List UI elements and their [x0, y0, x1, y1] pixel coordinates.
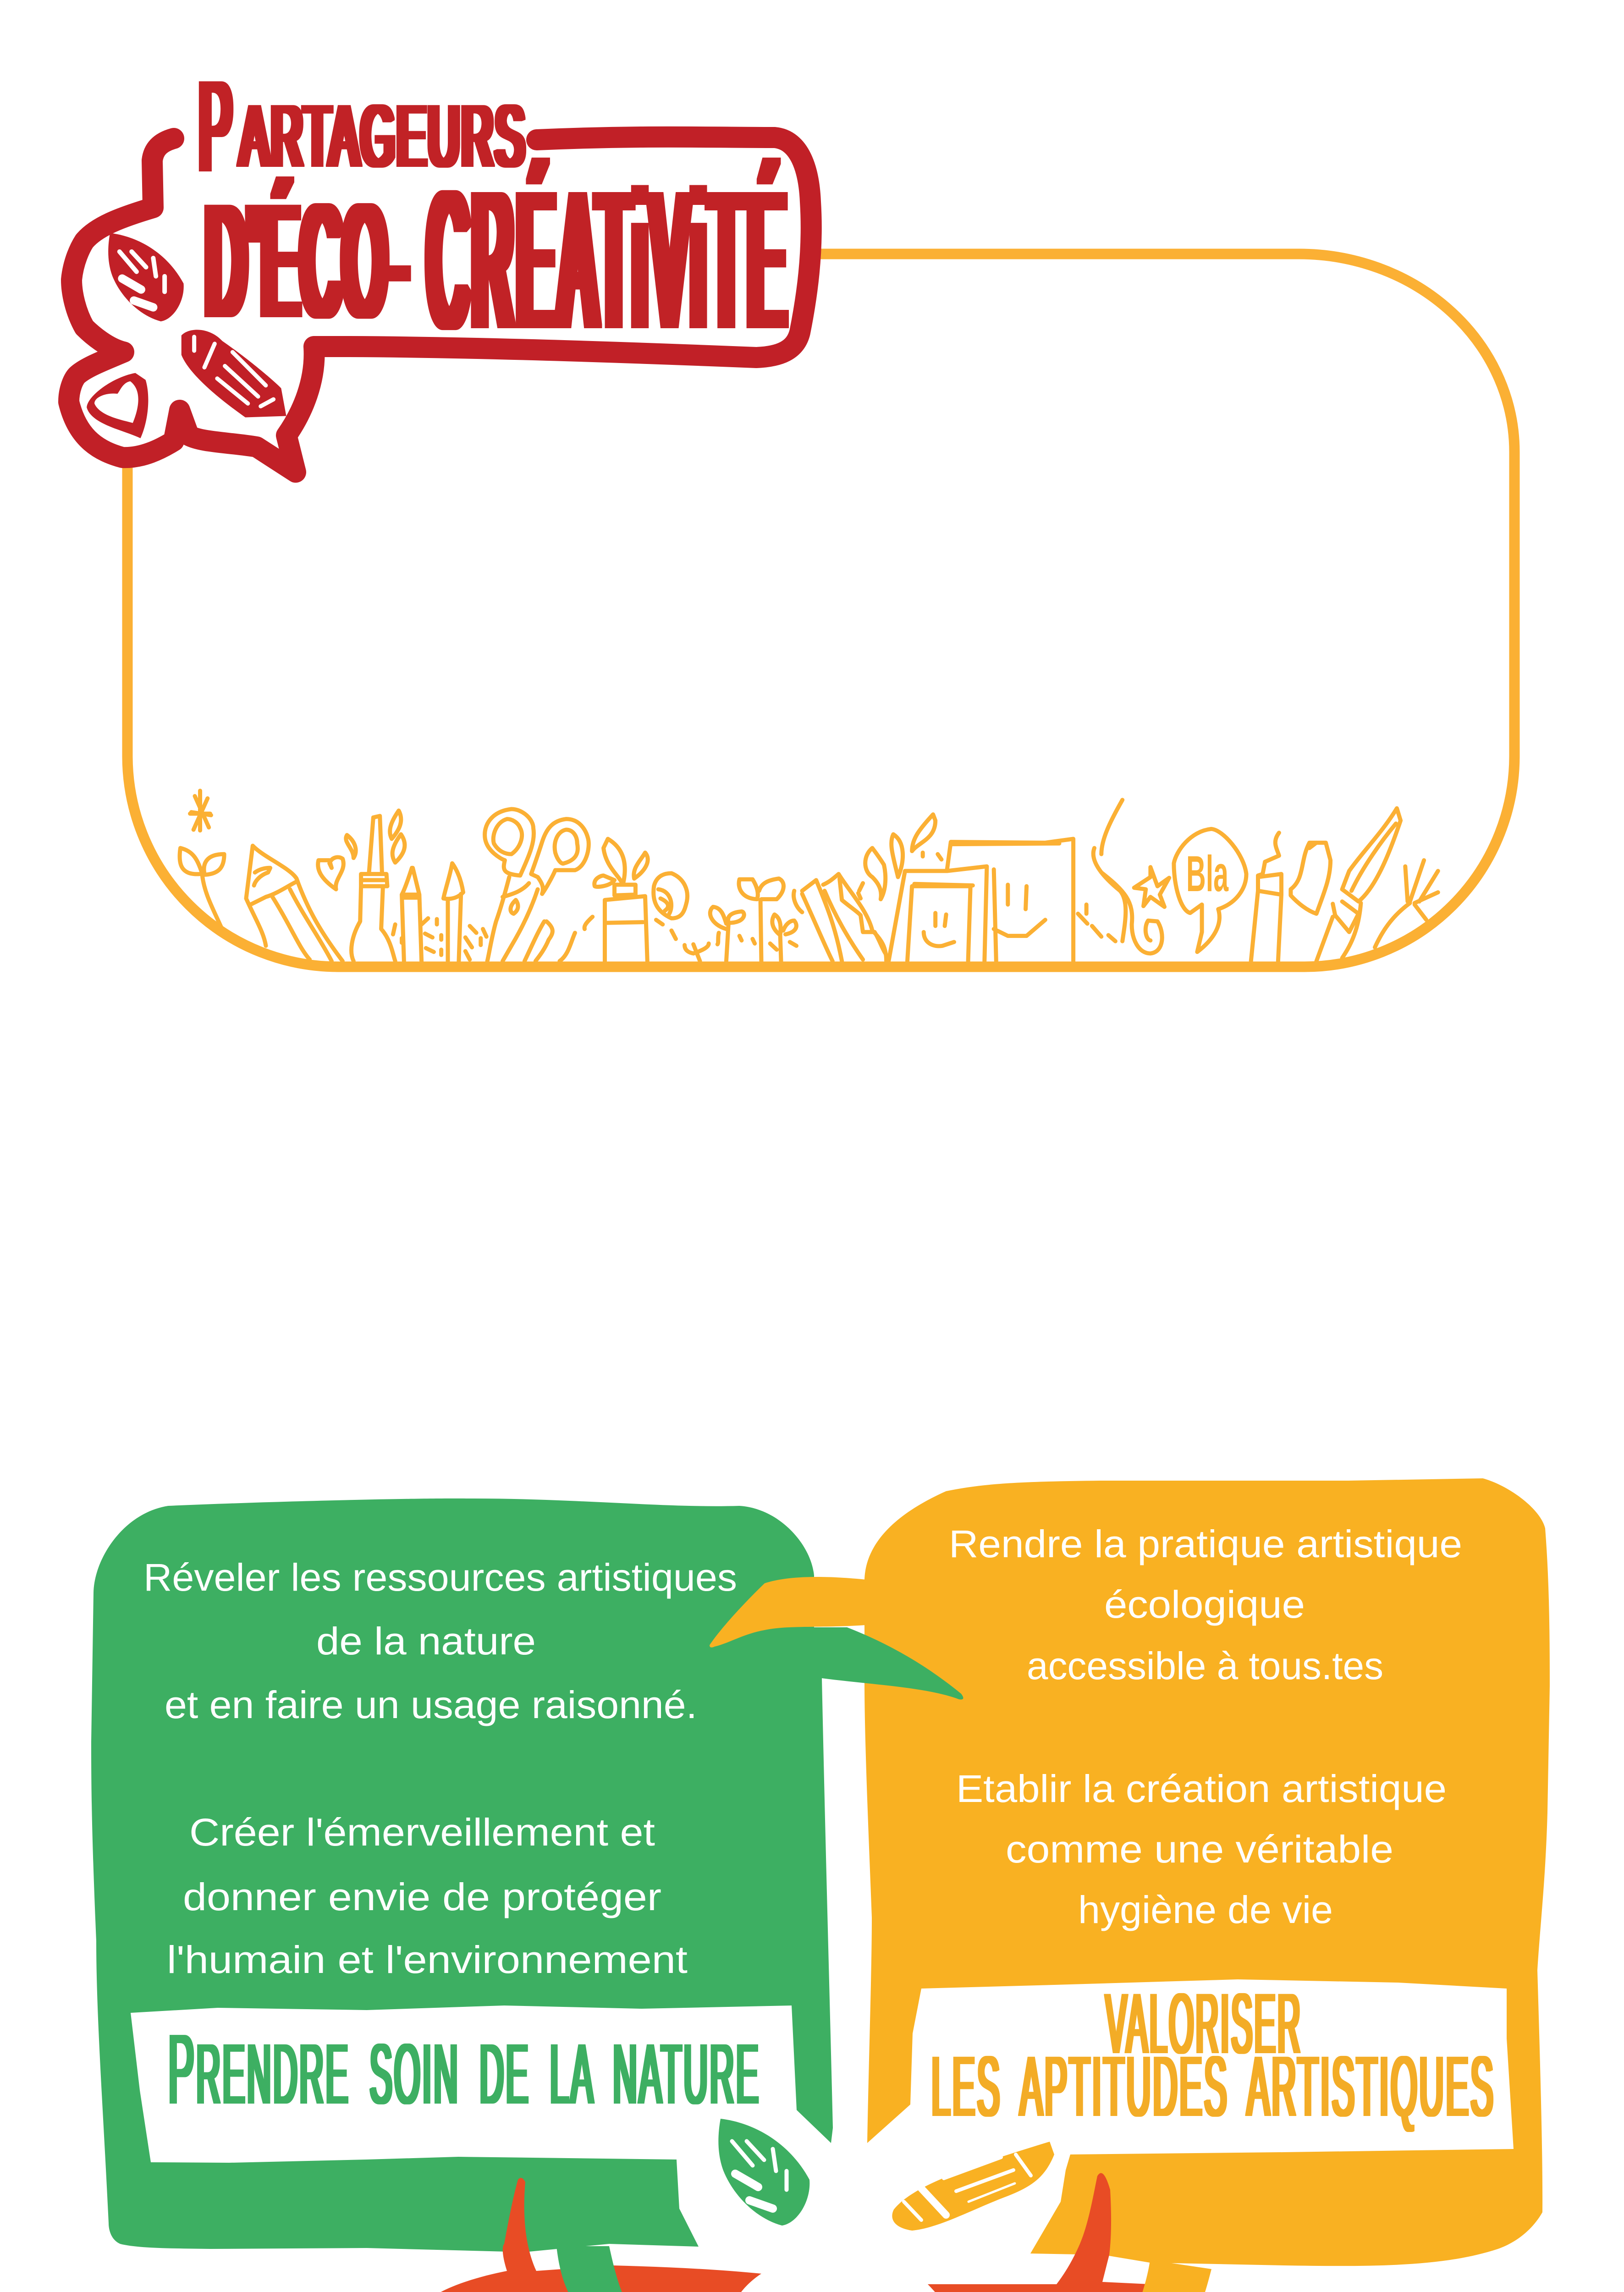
green panel text: et en faire un usage raisonné.: [165, 1683, 697, 1726]
green panel text: l'humain et l'environnement: [167, 1938, 688, 1981]
logo icon: leaf: [108, 233, 184, 321]
orange heading: [931, 1977, 1495, 2134]
orange panel text: Etablir la création artistique: [956, 1767, 1447, 1810]
orange heading: VALORISER: [1106, 1977, 1302, 2071]
orange label banner: [910, 1979, 1514, 2154]
red panel shape: [367, 2173, 1286, 2292]
logo icon: pencil: [182, 330, 286, 418]
orange panel text: Rendre la pratique artistique: [949, 1522, 1462, 1565]
panel: prendre soin de la nature: [91, 1499, 833, 2252]
logo: partageurs d'éco-créativité: [69, 55, 811, 472]
orange panel text: écologique: [1104, 1583, 1305, 1626]
doodles: right art supplies: [802, 800, 1438, 961]
green panel text: Créer l'émerveillement et: [189, 1811, 655, 1854]
text: PRENDRE SOIN DE LA NATURE: [168, 2014, 760, 2124]
panel: transmettre et s'épanouir sereinement: [367, 2173, 1286, 2292]
green panel text: donner envie de protéger: [183, 1875, 661, 1918]
logo speech bubble: [69, 137, 811, 472]
doodle word: bla: Bla: [1186, 846, 1228, 902]
logo: partageurs d'éco-créativité: D'ÉCO-: [206, 173, 410, 349]
orange panel text: comme une véritable: [1006, 1828, 1393, 1871]
green label banner: [131, 2006, 797, 2163]
orange panel text: hygiène de vie: [1078, 1888, 1333, 1931]
icon: green leaf: [718, 2119, 809, 2226]
logo icon: heart: [87, 373, 148, 438]
green panel shape: [91, 1499, 833, 2252]
orange frame: [127, 254, 1514, 967]
orange panel text: [949, 1522, 1462, 1931]
doodles: left art supplies: [180, 791, 802, 961]
speech tail: green leaf over orange panel: [814, 1627, 963, 1700]
speech tail: orange leaf over green panel: [710, 1577, 866, 1647]
orange panel shape: [864, 1478, 1550, 2266]
green panel text: [143, 1556, 737, 1981]
green panel text: Réveler les ressources artistiques: [143, 1556, 737, 1599]
icon: orange pencil: [892, 2142, 1054, 2231]
logo: partageurs d'éco-créativité: P: [199, 55, 232, 198]
panel: valoriser les aptitudes artistiques: [864, 1478, 1550, 2266]
speech tail: green leaf over red panel: [556, 2246, 705, 2292]
speech tail: orange leaf over red panel: [1092, 2260, 1211, 2292]
green panel text: de la nature: [316, 1620, 536, 1663]
logo: partageurs d'éco-créativité: ARTAGEURS: [240, 88, 527, 185]
orange panel text: accessible à tous.tes: [1027, 1644, 1383, 1687]
